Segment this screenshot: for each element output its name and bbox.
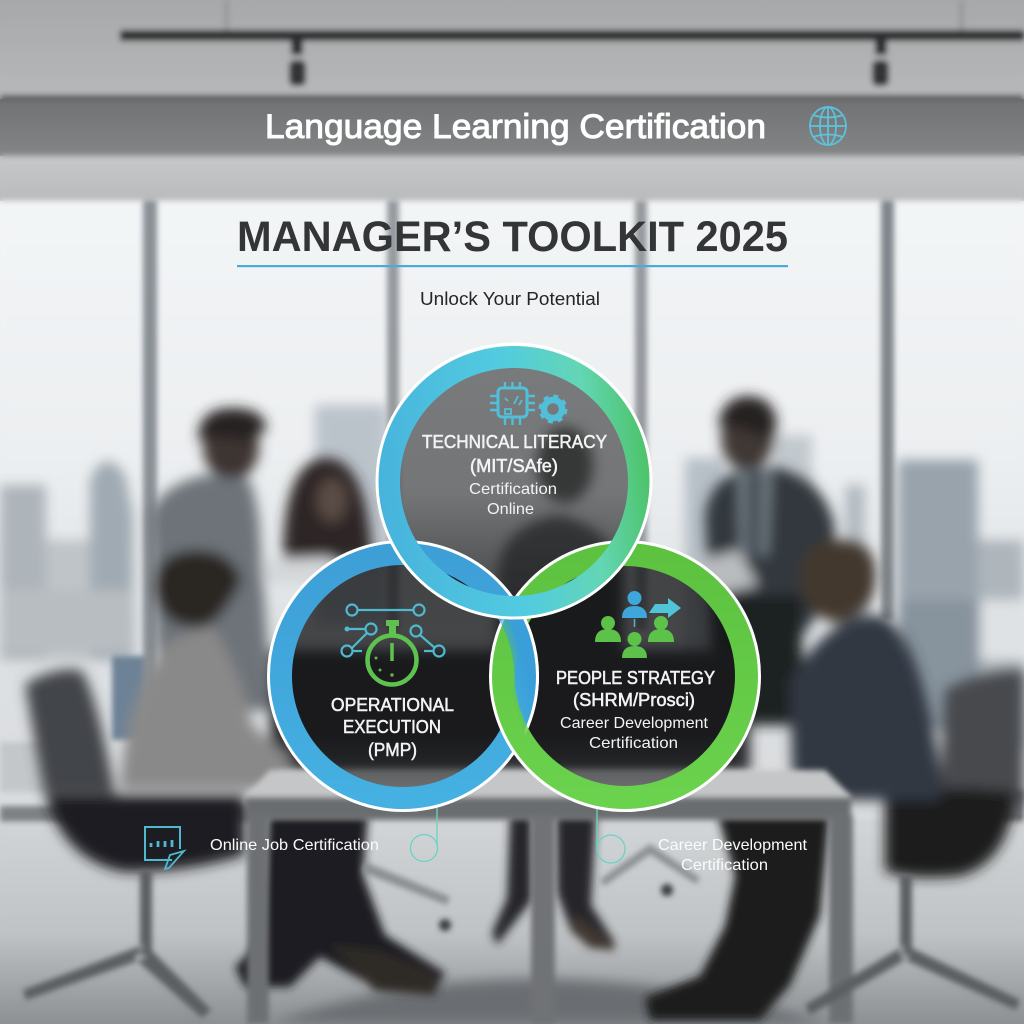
heading: people strategy: (SHRM/Prosci) xyxy=(573,689,695,710)
circle backdrops xyxy=(285,364,743,794)
label: career development certification xyxy=(658,837,808,874)
connector: right leader line and circle xyxy=(597,806,625,863)
icon: globe xyxy=(810,107,846,145)
icon: chip and gear xyxy=(490,382,566,425)
icon: stopwatch with circuit nodes xyxy=(342,604,444,684)
heading: technical literacy: Online xyxy=(487,501,534,518)
table xyxy=(245,770,851,820)
heading: operational execution: OPERATIONAL xyxy=(331,694,454,715)
ring: people strategy xyxy=(490,542,760,810)
heading: technical literacy: (MIT/SAfe) xyxy=(470,455,558,476)
dark zone behind the table xyxy=(270,650,750,772)
icon: people hierarchy with arrow xyxy=(595,591,681,658)
chair: left xyxy=(25,669,115,794)
chair bases xyxy=(23,870,1020,1018)
centre floor reflection xyxy=(270,979,830,1024)
ring: operational execution xyxy=(268,542,538,810)
heading: people strategy: PEOPLE STRATEGY xyxy=(556,667,715,688)
trousers and feet xyxy=(235,815,445,991)
heading: technical literacy: TECHNICAL LITERACY xyxy=(422,431,607,452)
person: standing woman, left xyxy=(283,458,372,560)
connector: left leader line and circle xyxy=(410,806,438,862)
person: standing man, left xyxy=(203,411,259,481)
label: career development certification: Certification xyxy=(681,857,768,874)
main title: MANAGER’S TOOLKIT 2025 xyxy=(237,213,788,261)
heading: people strategy xyxy=(556,667,715,752)
person: standing man, right xyxy=(721,405,773,471)
chair: right xyxy=(940,670,1024,805)
person: seated man xyxy=(799,540,876,623)
heading: people strategy: Certification xyxy=(589,735,678,752)
subtitle: Unlock Your Potential xyxy=(420,289,600,309)
heading: people strategy: Career Development xyxy=(560,715,709,732)
heading: operational execution xyxy=(331,694,454,760)
label: online job certification: Online Job Certification xyxy=(210,837,379,854)
heading: operational execution: (PMP) xyxy=(368,739,417,760)
heading: technical literacy: Certification xyxy=(469,481,557,498)
icon: online job certification board and pen xyxy=(145,827,184,869)
heading: technical literacy xyxy=(422,431,607,518)
ring: technical literacy xyxy=(377,344,651,618)
ring overlap: blue fading across green xyxy=(498,618,539,735)
banner title: Language Learning Certification xyxy=(265,108,766,146)
title underline xyxy=(237,265,788,267)
hazy skyline xyxy=(0,405,1024,750)
person: seated woman xyxy=(155,550,242,628)
heading: operational execution: EXECUTION xyxy=(343,716,441,737)
label: career development certification: Career Development xyxy=(658,837,808,854)
person: silhouette, centre xyxy=(537,427,593,503)
